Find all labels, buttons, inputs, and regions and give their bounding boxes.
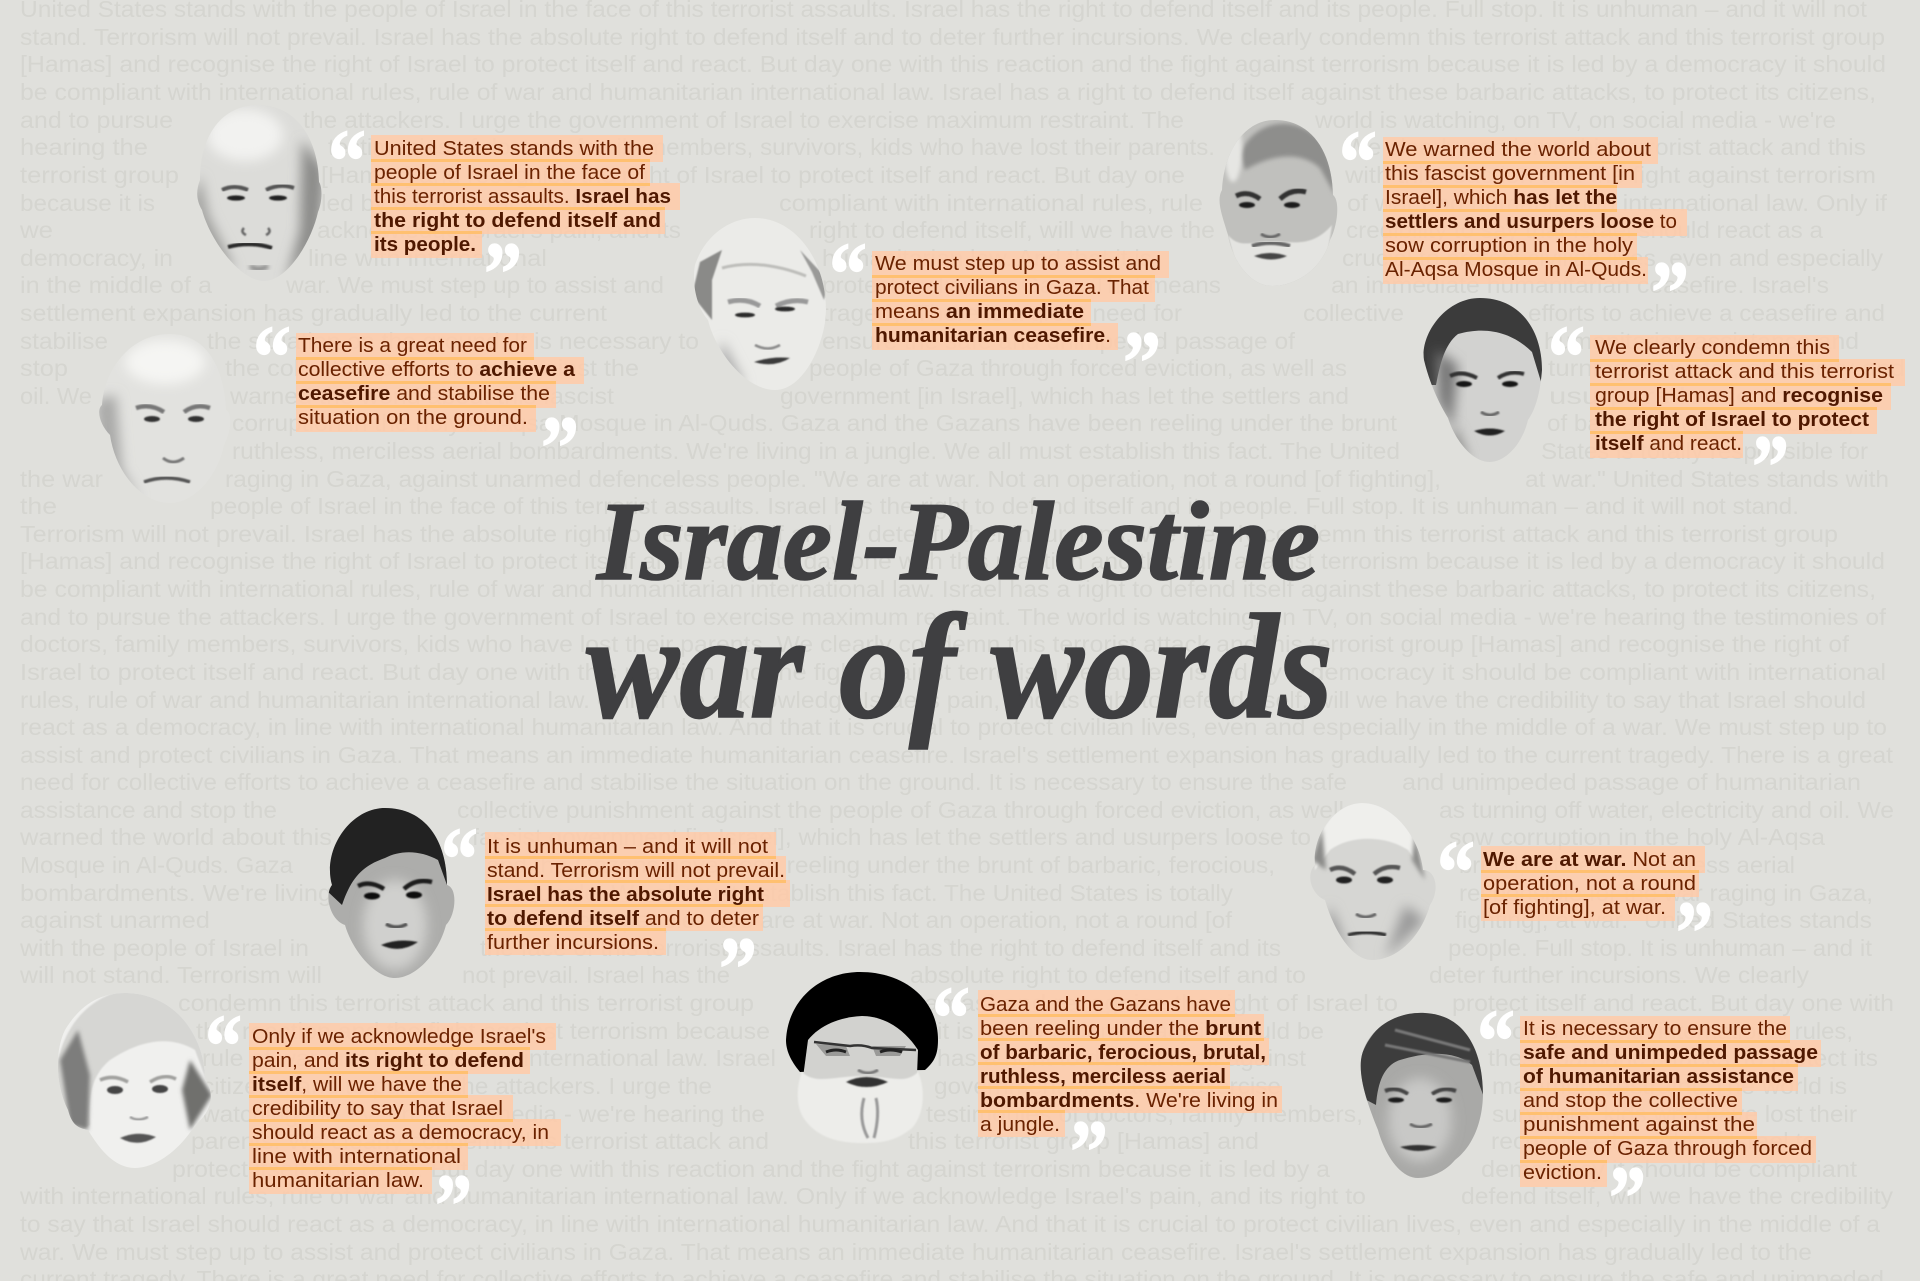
quote text: [of fighting], at war.	[1483, 897, 1666, 919]
quote text	[252, 1026, 549, 1192]
icon: closing quote mark: ”	[1070, 1103, 1108, 1202]
quote text: should react as a democracy, in	[252, 1122, 549, 1144]
icon: opening quote mark: “	[441, 810, 478, 909]
portrait: Ismail Haniyeh	[1220, 120, 1338, 260]
portrait: Benjamin Netanyahu	[1310, 802, 1436, 960]
quote text: further incursions.	[487, 932, 659, 954]
background text wall of quotations: humanitarian law. And that it is	[822, 245, 1152, 271]
background text wall of quotations: rule of war and humanitarian international law. Israel	[202, 1045, 776, 1071]
portrait: Joe Biden	[197, 110, 322, 275]
background text wall of quotations: war. We must step up to assist and protect civilians in Gaza. That means an immediate humanitarian ceasefire. Israel's settlement expansion has gradually led to the	[19, 1239, 1812, 1265]
background text wall of quotations: parents. We clearly condemn this terrorist attack and	[191, 1128, 769, 1154]
quote: acknowledge pain	[205, 997, 561, 1256]
quote text	[1385, 139, 1677, 281]
icon: opening quote mark: “	[829, 225, 867, 324]
quote text: terrorist attack and this terrorist	[1595, 361, 1894, 383]
quote text: of barbaric, ferocious, brutal,	[980, 1042, 1266, 1064]
background text wall of quotations: absolute right to defend itself and to	[910, 962, 1306, 988]
background text wall of quotations: not prevail. Israel has the	[462, 962, 730, 988]
background text wall of quotations: will not stand. Terrorism will	[19, 962, 322, 988]
background text wall of quotations: democracy it should be compliant	[1481, 1156, 1858, 1182]
quote: at war	[1437, 823, 1713, 983]
background text wall of quotations: maximum restraint. The world is	[1492, 1073, 1847, 1099]
background text wall of quotations: States is totally responsible for	[1541, 438, 1868, 464]
background text wall of quotations: [Hamas] and recognise the right of Israel to protect itself and react. But day one with this reaction and the fight against terrorism because it is led by a democracy it should	[20, 51, 1886, 77]
quote: safe passage	[1477, 992, 1821, 1248]
background text wall of quotations: humanitarian assistance and	[1544, 328, 1859, 354]
background text wall of quotations: sow corruption in the holy Al-Aqsa	[1449, 824, 1826, 850]
icon: opening quote mark: “	[328, 112, 366, 211]
quote: collective efforts	[253, 308, 584, 498]
title	[586, 480, 1333, 750]
quote text: Only if we acknowledge Israel's	[252, 1026, 546, 1048]
quote text: people of Israel in the face of	[374, 162, 645, 184]
background text wall of quotations: usurpers loose to sow	[1549, 383, 1853, 409]
background text wall of quotations: stand. Terrorism will not prevail. Israel has the absolute right to defend itself and to deter further incursions. We clearly condemn this terrorist attack and this terrorist group	[20, 24, 1885, 50]
background text wall of quotations: testimonies of doctors, family members,	[926, 1101, 1363, 1127]
highlight bars	[1520, 1016, 1821, 1187]
background text wall of quotations: corruption in the holy Al-Aqsa Mosque in Al-Quds. Gaza and the Gazans have been reeling under the brunt	[232, 410, 1397, 436]
quote: immediate ceasefire	[829, 225, 1169, 413]
portrait: Hassan Nasrallah	[786, 972, 938, 1143]
background text wall of quotations: bombardments. We're living	[20, 880, 332, 906]
highlight bars	[1383, 137, 1687, 284]
quote text	[1595, 337, 1894, 455]
quote text	[298, 335, 576, 429]
quote text: the right to defend itself and	[374, 210, 661, 232]
title: Israel-Palestine	[595, 480, 1320, 604]
portrait: Vladimir Putin	[99, 336, 212, 488]
background text wall of quotations: watching, on TV, on social media - we're hearing the	[201, 1101, 765, 1127]
background text wall of quotations: [Hamas] and recognise the right of Israel to protect itself and react. But day one with this reaction and the fight against terrorism because it is led by a democracy it should	[20, 548, 1885, 574]
background text wall of quotations: ensure the safe and unimpeded passage of	[822, 328, 1295, 354]
background text wall of quotations: [Hamas] and recognise the right of Israel to protect itself and react. But day one	[321, 162, 1185, 188]
icon: closing quote mark: ”	[1123, 314, 1161, 413]
highlight bars	[296, 333, 584, 432]
icon: opening quote mark: “	[1548, 308, 1585, 407]
quote text: We must step up to assist and	[875, 253, 1161, 275]
quote: Gaza and the Gazans	[932, 969, 1282, 1202]
background text wall of quotations: recognise the right of Israel to	[1491, 1128, 1816, 1154]
quote text: to defend itself and to deter	[487, 908, 759, 930]
background text wall of quotations: war. We must step up to assist and	[285, 272, 664, 298]
icon: opening quote mark: “	[1477, 992, 1515, 1091]
quote text: It is necessary to ensure the	[1523, 1018, 1787, 1040]
background text wall of quotations: assist and protect civilians in Gaza. That means an immediate humanitarian ceasefire. Israel's settlement expansion has gradually led to the current tragedy. There is a great	[20, 742, 1893, 768]
background text wall of quotations: stop	[20, 355, 68, 381]
quote text: situation on the ground.	[298, 407, 528, 429]
background text wall of quotations: rules, rule of war and humanitarian international law. Only if we acknowledge Israel's pain, and its right to defend itself, will we have the credibility to say that Israel should	[20, 687, 1866, 713]
background text wall of quotations: the attackers. I urge the government of Israel to exercise maximum restraint. The	[303, 107, 1184, 133]
background text wall of quotations: the collective punishment against the	[225, 355, 639, 381]
quote text: We clearly condemn this	[1595, 337, 1830, 359]
icon: closing quote mark: ”	[484, 225, 522, 324]
background text wall of quotations: with the people of Israel in	[19, 935, 309, 961]
background text wall of quotations: stabilise	[20, 328, 108, 354]
background text wall of quotations: the situation on the ground. It is necessary to	[207, 328, 699, 354]
background text wall of quotations: raging in Gaza, against unarmed defenceless people. "We are at war. Not an operation, not a round [of fighting],	[225, 466, 1441, 492]
background text wall of quotations: brutal, ruthless, merciless aerial	[1459, 852, 1795, 878]
quote text: this terrorist assaults. Israel has	[374, 186, 671, 208]
quote text	[875, 253, 1161, 347]
background text wall of quotations: the war	[20, 466, 103, 492]
quote text: itself and react.	[1595, 433, 1742, 455]
quote text: We are at war. Not an	[1483, 849, 1696, 871]
background text wall of quotations: has a right to defend itself against	[937, 1045, 1306, 1071]
highlight bars	[249, 1023, 561, 1194]
quote text: ruthless, merciless aerial	[980, 1066, 1226, 1088]
background text wall of quotations: against unarmed	[20, 907, 210, 933]
background text wall of quotations: citizens, and to pursue the attackers. I urge the	[202, 1073, 712, 1099]
background text wall of quotations: in a jungle. We all must establish this fact. The United States is totally	[487, 880, 1233, 906]
background text wall of quotations: democracy, in	[20, 245, 173, 271]
icon: closing quote mark: ”	[1752, 418, 1789, 517]
background text wall of quotations: oil. We	[20, 383, 92, 409]
background text wall of quotations: with this reaction and the fight against terrorism	[1344, 162, 1876, 188]
background text wall of quotations: it is led by a democracy it should be	[937, 1018, 1324, 1044]
background text wall of quotations: line with international	[308, 245, 547, 271]
quote text: the right of Israel to protect	[1595, 409, 1869, 431]
icon: closing quote mark: ”	[435, 1157, 472, 1256]
background text wall of quotations: these barbaric attacks, to protect its	[1488, 1045, 1878, 1071]
background text wall of quotations: right to defend itself, will we have the	[809, 217, 1215, 243]
background text wall of quotations: crucial to protect civilian lives, even and especially	[1342, 245, 1883, 271]
quote: fascist government	[1339, 113, 1689, 343]
background text wall of quotations: Israel to protect itself and react. But day one with this reaction and the fight against terrorism because it is led by a democracy it should be compliant with international	[20, 659, 1886, 685]
quote text: We warned the world about	[1385, 139, 1651, 161]
background text wall of quotations: the face of this terrorist assaults. Israel has the right to defend itself and its	[480, 935, 1281, 961]
icon: closing quote mark: ”	[719, 920, 757, 1019]
background text wall of quotations: terrorist group	[20, 162, 179, 188]
quote text: eviction.	[1523, 1162, 1602, 1184]
quote text: Al-Aqsa Mosque in Al-Quds.	[1385, 259, 1647, 281]
title: war of words	[586, 584, 1333, 750]
quote text: collective efforts to achieve a	[298, 359, 576, 381]
background text wall of quotations: with international rules, rule of war and humanitarian international law. Only if we acknowledge Israel's pain, and its right to	[19, 1183, 1366, 1209]
background text wall of quotations: ruthless, merciless aerial bombardments. We're living in a jungle. We all must establish this fact. The United	[232, 438, 1400, 464]
background text wall of quotations: settlement expansion has gradually led to the current	[20, 300, 607, 326]
quote text: this fascist government [in	[1385, 163, 1635, 185]
quote text: Israel has the absolute right	[487, 884, 764, 906]
quote text: safe and unimpeded passage	[1523, 1042, 1818, 1064]
background text wall of quotations: collective punishment against the people of Gaza through forced eviction, as well	[457, 797, 1344, 823]
quote text: Israel], which has let the	[1385, 187, 1617, 209]
background text wall of quotations: collective	[1303, 300, 1404, 326]
icon: opening quote mark: “	[1339, 113, 1377, 212]
background text wall of quotations: compliant with international rules,	[1500, 1018, 1853, 1044]
background text wall of quotations: government [in Israel], which has let the settlers and	[780, 383, 1349, 409]
quote text: ceasefire and stabilise the	[298, 383, 550, 405]
background text wall of quotations: Mosque in Al-Quds. Gaza	[20, 852, 294, 878]
background text wall of quotations: protect itself and react. But day one with this reaction and the fight against terrorism because it is led by a	[172, 1156, 1331, 1182]
background text wall of quotations: people. Full stop. It is unhuman – and it	[1448, 935, 1872, 961]
portrait: Antonio Guterres	[692, 218, 828, 390]
background text wall of quotations: hearing the	[20, 134, 148, 160]
quote text	[1483, 849, 1696, 919]
icon: closing quote mark: ”	[1651, 244, 1689, 343]
quote text: humanitarian ceasefire .	[875, 325, 1111, 347]
background text wall of quotations: because it is	[20, 190, 155, 216]
background text wall of quotations: and the Gazans have been reeling under the brunt of barbaric, ferocious,	[486, 852, 1275, 878]
quote text: itself, will we have the	[252, 1074, 462, 1096]
background text wall of quotations: testimonies of doctors, family members, survivors, kids who have lost their parents.	[328, 134, 1215, 160]
background text wall of quotations: this reaction and the fight against terrorism because	[196, 1018, 770, 1044]
background text wall of quotations: need for collective efforts to achieve a ceasefire and stabilise the situation on the ground. It is necessary to ensure the safe	[20, 769, 1347, 795]
quote text: operation, not a round	[1483, 873, 1696, 895]
quote text: and stop the collective	[1523, 1090, 1738, 1112]
background text wall of quotations: warned the world about this fascist	[229, 383, 614, 409]
quote text: protect civilians in Gaza. That	[875, 277, 1149, 299]
quote text: settlers and usurpers loose to	[1385, 211, 1677, 233]
quote text: a jungle.	[980, 1114, 1060, 1136]
icon: opening quote mark: “	[253, 308, 291, 407]
background text wall of quotations: of barbaric, ferocious, brutal,	[1547, 410, 1854, 436]
quote text: punishment against the	[1523, 1114, 1755, 1136]
quote text: United States stands with the	[374, 138, 654, 160]
background text wall of quotations: warned the world about this	[19, 824, 332, 850]
background text wall of quotations: protect civilians in Gaza. That means	[822, 272, 1221, 298]
background text wall of quotations: this terrorist group [Hamas] and	[908, 1128, 1259, 1154]
background text wall of quotations: [Hamas] and recognise the right of Israel to	[898, 990, 1398, 1016]
background text wall of quotations: tragedy. There is a great need for	[822, 300, 1182, 326]
background text wall of quotations: We clearly condemn this terrorist attack and this	[1345, 134, 1866, 160]
background text wall of quotations: world is watching, on TV, on social media - we're	[1314, 107, 1836, 133]
background text wall of quotations: led by a democracy it should be	[321, 190, 666, 216]
background text wall of quotations: defenceless people. "We are at war. Not an operation, not a round [of	[485, 907, 1232, 933]
highlight bars	[371, 135, 680, 258]
background text wall of quotations: compliant with international rules, rule	[779, 190, 1203, 216]
icon: opening quote mark: “	[932, 969, 970, 1068]
background text wall of quotations: efforts to achieve a ceasefire and	[1528, 300, 1885, 326]
quote text: bombardments . We're living in	[980, 1090, 1278, 1112]
quote text: its people.	[374, 234, 476, 256]
background text wall of quotations: at war." United States stands with	[1525, 466, 1889, 492]
background text wall of quotations: of war and humanitarian international law. Only if	[1347, 190, 1887, 216]
portrait: Emmanuel Macron	[1418, 295, 1543, 462]
quote text: There is a great need for	[298, 335, 527, 357]
background text wall of quotations: Terrorism will not prevail. Israel has the absolute right to defend itself and to deter further incursions. We clearly condemn this terrorist attack and this terrorist group	[20, 521, 1838, 547]
background text wall of quotations: and to pursue the attackers. I urge the government of Israel to exercise maximum restraint. The world is watching, on TV, on social media - we're hearing the testimonies of	[20, 604, 1886, 630]
quote text: of humanitarian assistance	[1523, 1066, 1794, 1088]
background text wall of quotations: deter further incursions. We clearly	[1429, 962, 1809, 988]
portrait: Ursula von der Leyen	[56, 990, 212, 1168]
icon: closing quote mark: ”	[1609, 1149, 1646, 1248]
quote text: It is unhuman – and it will not	[487, 836, 768, 858]
background text wall of quotations: doctors, family members, survivors, kids who have lost their parents. We clearly condemn this terrorist attack and this terrorist group [Hamas] and recognise the right of	[20, 631, 1849, 657]
background text wall of quotations: be compliant with international rules, rule of war and humanitarian international law. Israel has a right to defend itself against these barbaric attacks, to protect its citizens,	[20, 79, 1876, 105]
portrait: Rishi Sunak	[325, 805, 454, 978]
highlight bars	[1481, 846, 1705, 921]
background text wall of quotations: in the middle of a	[20, 272, 213, 298]
portrait: Xi Jinping	[1356, 1010, 1486, 1178]
background text wall of quotations: be compliant with international rules, rule of war and humanitarian international law. Israel has a right to defend itself against these barbaric attacks, to protect its citizens,	[20, 576, 1876, 602]
quote text: means an immediate	[875, 301, 1084, 323]
background text wall of quotations: people of Israel in the face of this terrorist assaults. Israel has the right to defend itself and its people. Full stop. It is unhuman – and it will not stand.	[210, 493, 1799, 519]
background text wall of quotations: react as a democracy, in line with international humanitarian law. And that it is crucial to protect civilian lives, even and especially in the middle of a war. We must step up to	[20, 714, 1887, 740]
background text wall of quotations: condemn this terrorist attack and this terrorist group	[178, 990, 754, 1016]
quote: clearly condemn	[1548, 308, 1905, 517]
quote text: pain, and its right to defend	[252, 1050, 524, 1072]
quote text: sow corruption in the holy	[1385, 235, 1633, 257]
background text wall of quotations: fascist government [in Israel], which has let the settlers and usurpers loose to	[472, 824, 1311, 850]
highlight bars	[872, 251, 1169, 350]
icon: closing quote mark: ”	[541, 399, 579, 498]
icon: closing quote mark: ”	[1676, 884, 1713, 983]
icon: opening quote mark: “	[205, 997, 242, 1096]
background text wall of quotations: as turning off water, electricity and oil. We	[1439, 797, 1894, 823]
background text wall of quotations: and unimpeded passage of humanitarian	[1402, 769, 1861, 795]
background text wall of quotations: an immediate humanitarian ceasefire. Israel's	[1331, 272, 1829, 298]
quote text: stand. Terrorism will not prevail.	[487, 860, 785, 882]
quote text: credibility to say that Israel	[252, 1098, 503, 1120]
quote text: Gaza and the Gazans have	[980, 994, 1231, 1016]
background text wall of quotations: fighting], at war." United States stands	[1455, 907, 1872, 933]
highlight bars	[978, 990, 1282, 1137]
quote text: line with international	[252, 1146, 461, 1168]
background text wall of quotations: the	[20, 493, 57, 519]
background text wall of quotations: we	[19, 217, 53, 243]
icon: opening quote mark: “	[1437, 823, 1475, 922]
background text wall of quotations: survivors, kids who have lost their	[1492, 1101, 1857, 1127]
quote text	[374, 138, 671, 256]
background text wall of quotations: assistance and stop the	[20, 797, 277, 823]
quote text: group [Hamas] and recognise	[1595, 385, 1883, 407]
background text wall of quotations: responsible for the war raging in Gaza,	[1459, 880, 1873, 906]
background text wall of quotations: turning off water, electricity and	[1548, 355, 1905, 381]
background text wall of quotations: and to pursue	[20, 107, 173, 133]
quote: unhuman	[441, 810, 790, 1019]
background text wall of quotations: government of Israel to exercise	[934, 1073, 1281, 1099]
background text wall of quotations: acknowledge Israel's pain, and its	[317, 217, 681, 243]
background text wall of quotations: credibility to say that Israel should react as a	[1346, 217, 1824, 243]
quote text: people of Gaza through forced	[1523, 1138, 1812, 1160]
quote: United States	[328, 112, 680, 324]
background text wall of quotations: protect itself and react. But day one with	[1452, 990, 1894, 1016]
background text wall of quotations: defend itself, will we have the credibility	[1461, 1183, 1893, 1209]
highlight bars	[485, 832, 790, 955]
background text wall of quotations: to say that Israel should react as a democracy, in line with international humanitarian law. And that it is crucial to protect civilian lives, even and especially in the middle of a	[20, 1211, 1881, 1237]
quote text: humanitarian law.	[252, 1170, 424, 1192]
quote text: been reeling under the brunt	[980, 1018, 1261, 1040]
background text wall of quotations: people of Gaza through forced eviction, as well as	[809, 355, 1347, 381]
quote text	[1523, 1018, 1818, 1184]
quote text	[980, 994, 1278, 1136]
quote text	[487, 836, 785, 954]
highlight bars	[1590, 335, 1905, 458]
